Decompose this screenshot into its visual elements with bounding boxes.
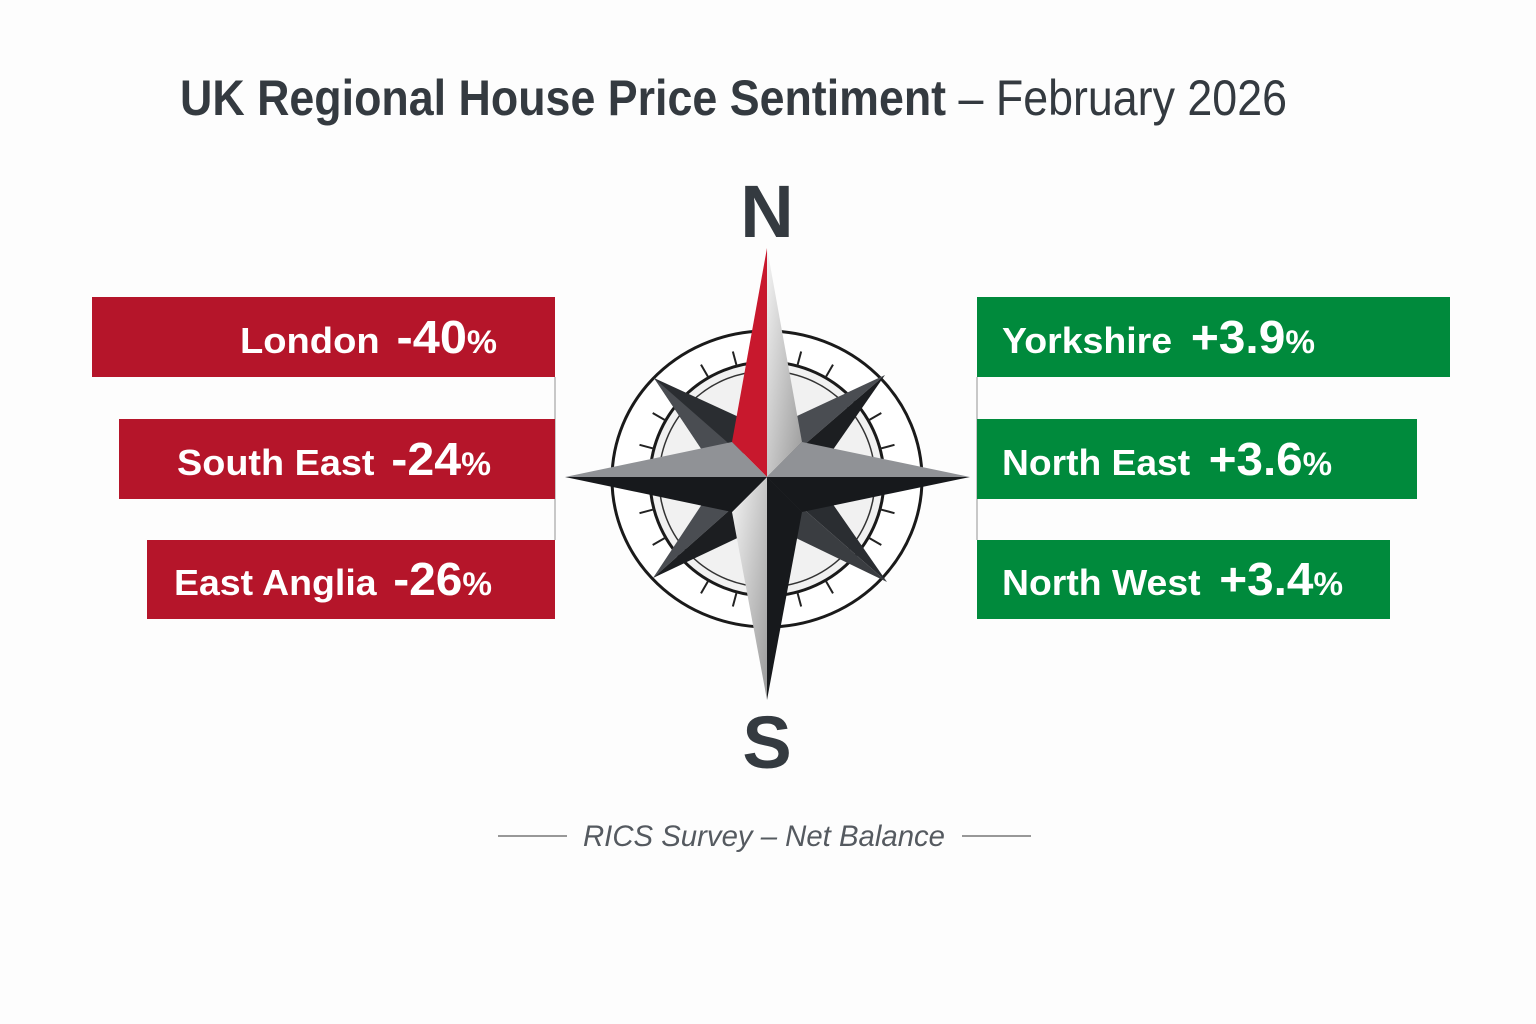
bar: London [92,297,555,377]
main points [732,248,767,477]
north label: N [740,170,794,253]
diagonal points [654,378,767,477]
bar: South East: South East -24% [177,433,491,485]
bar: London: London -40% [240,311,497,363]
bar: East Anglia [147,540,555,619]
bar: East Anglia: East Anglia -26% [174,553,492,605]
compass rose [565,248,970,700]
south label: S [742,701,792,784]
bar: North East [977,419,1417,499]
bar: North West: North West +3.4% [1002,553,1343,605]
bar: North West [977,540,1390,619]
title: UK Regional House Price Sentiment – February 2026 [180,70,1287,126]
footer note: RICS Survey – Net Balance [583,820,945,853]
bar: South East [119,419,555,499]
bar: Yorkshire: Yorkshire +3.9% [1002,311,1315,363]
bar: North East: North East +3.6% [1002,433,1332,485]
connector lines [555,377,977,540]
bar: Yorkshire [977,297,1450,377]
